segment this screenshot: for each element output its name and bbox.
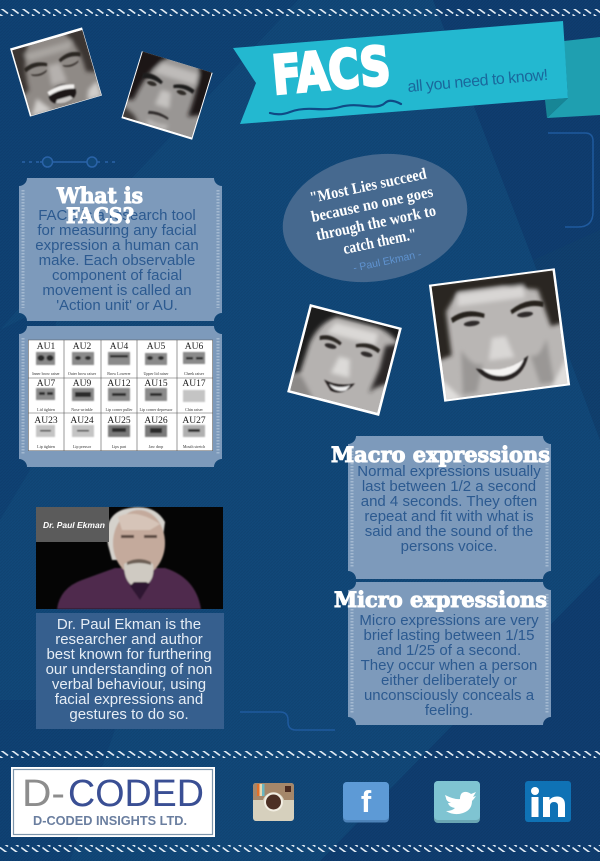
panel: action units chart: AU6 bbox=[185, 342, 203, 352]
panel: action units chart: AU5 bbox=[147, 342, 165, 352]
title banner bbox=[233, 21, 568, 124]
quote text: - Paul Ekman - bbox=[352, 248, 423, 274]
body text: expression a human can bbox=[35, 237, 199, 254]
body text: feeling. bbox=[425, 702, 473, 719]
panel: action units chart: AU1 bbox=[37, 342, 55, 352]
panel: action units chart: Inner brow raiser bbox=[32, 371, 60, 376]
body text: repeat and fit with what is bbox=[364, 508, 534, 525]
logo: D-CODED: D-CODED INSIGHTS LTD. bbox=[33, 813, 187, 828]
body text: Micro expressions are very bbox=[359, 612, 539, 629]
panel: action units chart: Upper lid raiser bbox=[143, 371, 169, 376]
icon: facebook bbox=[343, 782, 389, 822]
footer stripe bands bbox=[0, 751, 600, 852]
panel: action units chart: AU15 bbox=[144, 379, 168, 389]
panel: action units chart: AU26 bbox=[144, 416, 168, 426]
body text: for measuring any facial bbox=[37, 222, 197, 239]
panel: Ekman bio: best known for furthering bbox=[46, 646, 212, 663]
body text: and 1/25 of a second. bbox=[377, 642, 521, 659]
panel: action units chart: Lid tighten bbox=[37, 407, 55, 412]
panel: action units chart: Mouth stretch bbox=[183, 444, 205, 449]
photo: Dr. Paul Ekman: Dr. Paul Ekman bbox=[43, 520, 105, 530]
heading: FACS? bbox=[66, 203, 134, 228]
body text: FACS is a research tool bbox=[38, 207, 196, 224]
body text bbox=[357, 463, 541, 555]
panel: Ekman bio: researcher and author bbox=[55, 631, 203, 648]
panel: macro expressions bbox=[331, 436, 551, 579]
panel: Ekman bio: facial expressions and bbox=[55, 691, 203, 708]
panel: action units chart: AU12 bbox=[107, 379, 131, 389]
body text: Normal expressions usually bbox=[357, 463, 541, 480]
panel: action units chart: Brow Lowerer bbox=[107, 371, 131, 376]
decorative bracket line bbox=[548, 133, 593, 227]
panel: action units chart: Nose wrinkle bbox=[71, 407, 93, 412]
panel: action units chart: AU25 bbox=[107, 416, 131, 426]
body text bbox=[359, 612, 539, 719]
logo: D-CODED: D- bbox=[22, 773, 65, 815]
panel: action units chart: Lip tighten bbox=[37, 444, 55, 449]
panel: action units chart: Jaw drop bbox=[149, 444, 163, 449]
photo: big smile face bbox=[426, 267, 573, 403]
panel: action units chart: AU23 bbox=[34, 416, 58, 426]
photo: laughing face bbox=[8, 26, 104, 118]
body text: 'Action unit' or AU. bbox=[56, 297, 178, 314]
panel: action units chart: Lip corner puller bbox=[105, 407, 133, 412]
panel: action units chart: AU7 bbox=[37, 379, 55, 389]
body text bbox=[35, 207, 199, 314]
body text: They occur when a person bbox=[361, 657, 537, 674]
body text: brief lasting between 1/15 bbox=[364, 627, 534, 644]
body text: last between 1/2 a second bbox=[362, 478, 536, 495]
subtitle: all you need to know! bbox=[407, 67, 549, 96]
icon: instagram bbox=[253, 783, 294, 821]
panel: action units chart: Cheek raiser bbox=[184, 371, 205, 376]
logo: D-CODED: CODED bbox=[68, 773, 204, 815]
body text: component of facial bbox=[52, 267, 182, 284]
panel: what is FACS bbox=[19, 178, 222, 321]
panel: action units chart: AU17 bbox=[182, 379, 206, 389]
body text: either deliberately or bbox=[381, 672, 517, 689]
panel: action units chart: AU9 bbox=[73, 379, 91, 389]
panel: action units chart: AU4 bbox=[110, 342, 128, 352]
title: FACS: FACS bbox=[270, 36, 393, 107]
panel: Ekman bio: Dr. Paul Ekman is the bbox=[57, 616, 201, 633]
quote text: catch them." bbox=[342, 226, 419, 258]
quote bubble bbox=[272, 140, 478, 296]
body text: movement is called an bbox=[42, 282, 192, 299]
node connector bbox=[22, 157, 118, 167]
body text: persons voice. bbox=[401, 538, 497, 555]
panel: action units chart: AU27 bbox=[182, 416, 206, 426]
panel: action units chart bbox=[19, 326, 222, 467]
top stripe band bbox=[0, 9, 600, 16]
panel: Ekman bio: gestures to do so. bbox=[69, 706, 189, 723]
icon: linkedin bbox=[525, 781, 571, 822]
heading: What is bbox=[56, 183, 143, 208]
panel: action units chart: Lips part bbox=[112, 444, 127, 449]
quote text: "Most Lies succeed bbox=[308, 166, 428, 207]
heading: Macro expressions bbox=[331, 442, 550, 467]
decorative connector line bbox=[240, 712, 335, 730]
logo: D-CODED bbox=[11, 767, 215, 837]
title banner fold bbox=[545, 37, 600, 118]
quote text: through the work to bbox=[315, 202, 438, 244]
panel: action units chart: AU2 bbox=[73, 342, 91, 352]
icon: facebook: f bbox=[361, 784, 372, 819]
panel: micro expressions bbox=[334, 582, 551, 725]
panel: action units chart: Outer brow raiser bbox=[68, 371, 97, 376]
body text: and 4 seconds. They often bbox=[361, 493, 537, 510]
heading: Micro expressions bbox=[334, 587, 547, 612]
squiggle underline bbox=[270, 101, 401, 114]
photo: slight smile face bbox=[284, 301, 405, 419]
panel: action units chart: Lip pressor bbox=[73, 444, 92, 449]
photo: Dr. Paul Ekman bbox=[36, 507, 223, 609]
panel: action units chart: AU24 bbox=[70, 416, 94, 426]
panel: action units chart: Lip corner depressor bbox=[139, 407, 173, 412]
photo: neutral face bbox=[121, 51, 213, 140]
panel: Ekman bio: verbal behaviour, using bbox=[52, 676, 206, 693]
body text: said and the sound of the bbox=[365, 523, 533, 540]
icon: twitter bbox=[434, 781, 480, 823]
quote text: because no one goes bbox=[310, 184, 435, 226]
panel: Ekman bio: our understanding of non bbox=[46, 661, 212, 678]
heading bbox=[56, 183, 143, 228]
body text: unconsciously conceals a bbox=[364, 687, 535, 704]
panel: action units chart: Chin raiser bbox=[185, 407, 203, 412]
panel: Ekman bio bbox=[36, 613, 224, 729]
quote text bbox=[306, 165, 446, 281]
body text: make. Each observable bbox=[39, 252, 195, 269]
